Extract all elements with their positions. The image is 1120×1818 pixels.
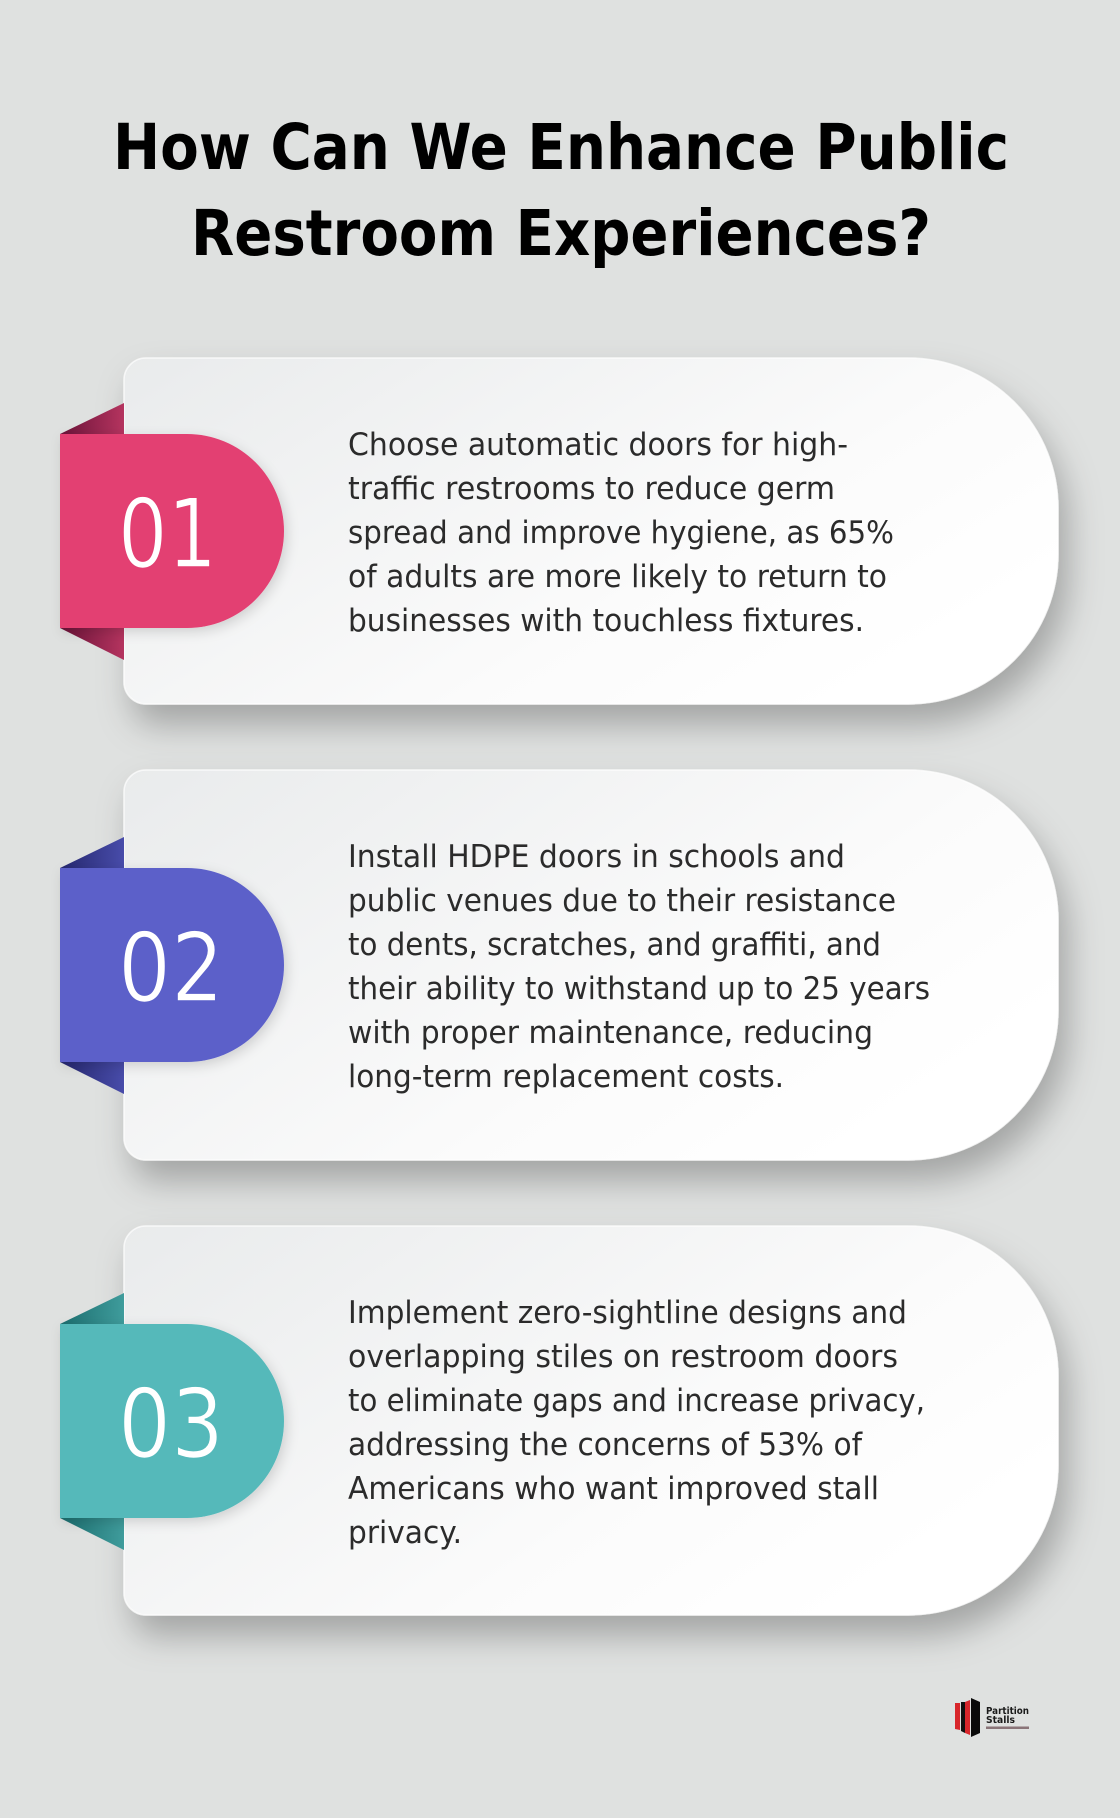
title: How Can We Enhance Public [113, 111, 1009, 184]
badge 03 [60, 1324, 284, 1518]
text 03: overlapping stiles on restroom doors [348, 1339, 898, 1375]
title: Restroom Experiences? [191, 197, 931, 270]
panel: step 03 [60, 1226, 1058, 1615]
panel: step 02 [60, 770, 1058, 1160]
ribbon fold bottom 02 [60, 1062, 124, 1094]
icon: partition bars [955, 1698, 980, 1737]
text 03: privacy. [348, 1515, 462, 1551]
logo wordmark: Stalls [986, 1715, 1015, 1726]
text 03 [348, 1295, 925, 1551]
logo tagline strip [986, 1726, 1029, 1729]
number 01: 01 [118, 480, 217, 590]
text 02: public venues due to their resistance [348, 883, 896, 919]
logo wordmark [986, 1706, 1029, 1726]
ribbon fold top 03 [60, 1293, 124, 1324]
text 01: Choose automatic doors for high- [348, 427, 848, 463]
badge 02 [60, 868, 284, 1062]
number 02: 02 [118, 914, 224, 1024]
card 02 shape [124, 770, 1058, 1160]
card 03 shape [124, 1226, 1058, 1615]
text 03: Implement zero-sightline designs and [348, 1295, 907, 1331]
ribbon fold top 01 [60, 403, 124, 434]
text 02: to dents, scratches, and graffiti, and [348, 927, 881, 963]
card 01 shape [124, 358, 1058, 704]
text 02: Install HDPE doors in schools and [348, 839, 845, 875]
title [113, 111, 1009, 270]
badge 01 [60, 434, 284, 628]
logo wordmark: Partition [986, 1706, 1029, 1717]
text 02: their ability to withstand up to 25 years [348, 971, 930, 1007]
text 02: with proper maintenance, reducing [348, 1015, 873, 1051]
ribbon fold bottom 03 [60, 1518, 124, 1550]
text 01 [348, 427, 894, 639]
number 03: 03 [118, 1370, 224, 1480]
text 02 [348, 839, 930, 1095]
text 01: businesses with touchless fixtures. [348, 603, 864, 639]
ribbon fold top 02 [60, 837, 124, 868]
text 01: traffic restrooms to reduce germ [348, 471, 835, 507]
text 03: to eliminate gaps and increase privacy, [348, 1383, 925, 1419]
text 01: of adults are more likely to return to [348, 559, 887, 595]
text 02: long-term replacement costs. [348, 1059, 784, 1095]
text 03: Americans who want improved stall [348, 1471, 879, 1507]
text 01: spread and improve hygiene, as 65% [348, 515, 894, 551]
panel: step 01 [60, 358, 1058, 704]
text 03: addressing the concerns of 53% of [348, 1427, 863, 1463]
ribbon fold bottom 01 [60, 628, 124, 660]
logo: Partition Stalls [955, 1698, 1029, 1737]
